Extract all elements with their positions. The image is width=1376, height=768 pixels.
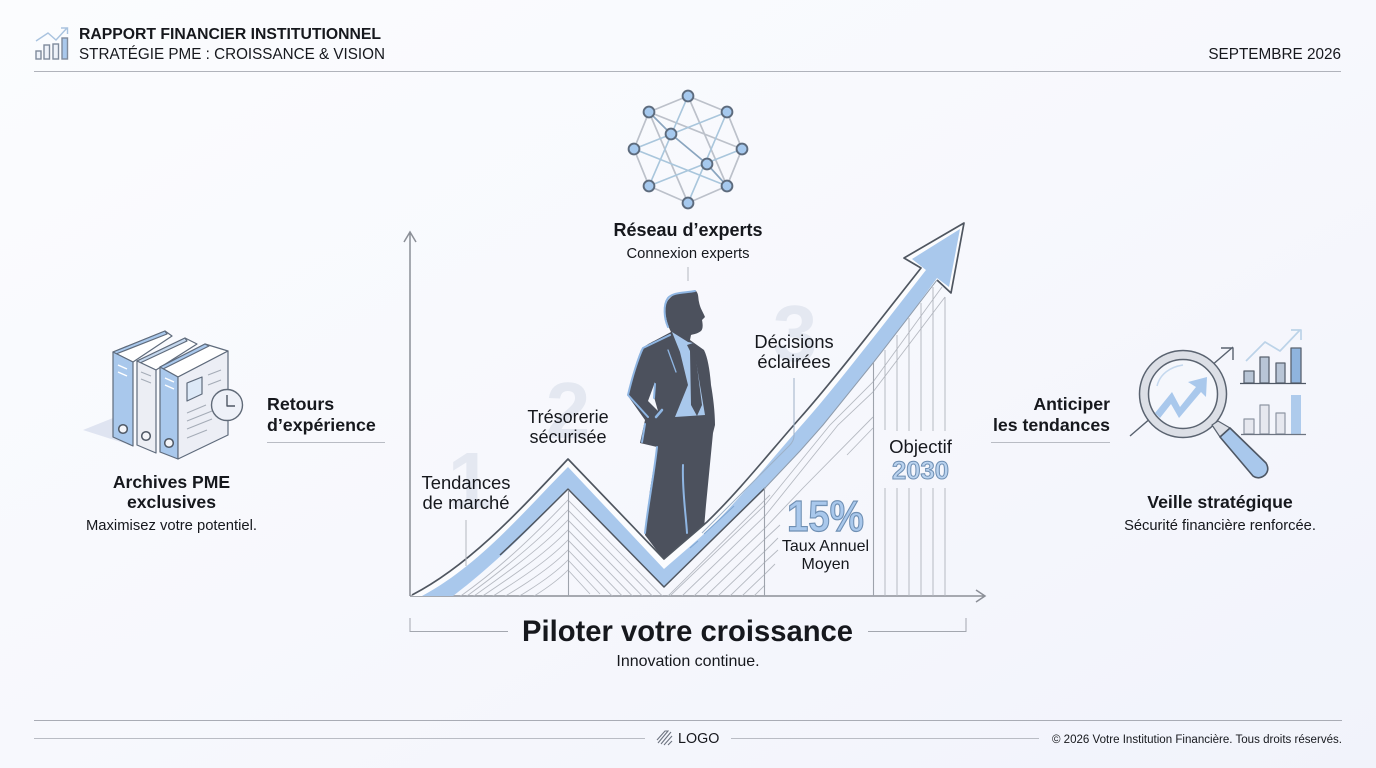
stat: objectif 2030: Objectif xyxy=(889,436,953,457)
growth arrow band xyxy=(412,223,964,596)
caption: network: Connexion experts xyxy=(626,246,750,262)
vertical guide lines xyxy=(466,287,945,596)
copyright: © 2026 Votre Institution Financière. Tous droits réservés. xyxy=(1052,734,1342,746)
stat: 15 percent xyxy=(782,492,869,573)
caption: strategic watch: Sécurité financière renforcée. xyxy=(1124,518,1316,534)
report title: RAPPORT FINANCIER INSTITUTIONNEL xyxy=(79,26,381,43)
logo text: LOGO xyxy=(678,731,719,747)
stat: objectif 2030 xyxy=(889,436,953,485)
stat: objectif 2030: 2030 xyxy=(892,457,949,485)
heading: archives: exclusives xyxy=(127,492,216,512)
panel: main title xyxy=(410,615,966,670)
panel: growth chart xyxy=(403,222,986,602)
label: tendances de marché: Tendances xyxy=(422,472,510,493)
panel: strategic watch xyxy=(991,330,1316,534)
stat: 15 percent: 15% xyxy=(787,492,864,541)
label: trésorerie sécurisée: Trésorerie xyxy=(527,407,609,427)
ghost numerals: 1 xyxy=(448,436,492,525)
hatched area xyxy=(460,286,945,596)
label: retours d'expérience: d’expérience xyxy=(267,415,376,435)
icon: binders xyxy=(83,331,242,459)
footer xyxy=(34,720,1342,747)
stat: 15 percent: Taux Annuel xyxy=(782,538,869,555)
icon: logo xyxy=(657,731,672,745)
main heading: Piloter votre croissance xyxy=(522,615,853,648)
stat: 15 percent: Moyen xyxy=(801,556,850,573)
chart axes xyxy=(404,232,985,602)
heading: archives: Archives PME xyxy=(113,472,230,492)
panel: archives xyxy=(83,331,385,534)
label: trésorerie sécurisée: sécurisée xyxy=(529,427,607,447)
heading: network: Réseau d’experts xyxy=(613,220,763,240)
date: SEPTEMBRE 2026 xyxy=(1208,46,1341,63)
ghost numerals xyxy=(448,289,817,525)
label: décisions éclairées: éclairées xyxy=(757,351,831,372)
panel: expert network xyxy=(613,91,763,281)
icon: report chart xyxy=(36,28,68,59)
label: anticiper les tendances: les tendances xyxy=(993,415,1110,435)
ghost numerals: 2 xyxy=(546,366,590,455)
ghost numerals: 3 xyxy=(773,289,817,378)
icon: magnifier and charts xyxy=(1130,330,1306,478)
report subtitle: STRATÉGIE PME : CROISSANCE & VISION xyxy=(79,44,385,63)
main caption: Innovation continue. xyxy=(616,653,760,670)
label: tendances de marché: de marché xyxy=(423,492,509,513)
heading: strategic watch: Veille stratégique xyxy=(1147,492,1293,512)
figure: businessman xyxy=(628,290,715,560)
caption: archives: Maximisez votre potentiel. xyxy=(86,518,257,534)
header xyxy=(34,26,1341,72)
label: décisions éclairées: Décisions xyxy=(754,331,834,352)
icon: network xyxy=(629,91,747,208)
label: anticiper les tendances: Anticiper xyxy=(1033,394,1110,414)
label: retours d'expérience: Retours xyxy=(267,394,334,414)
